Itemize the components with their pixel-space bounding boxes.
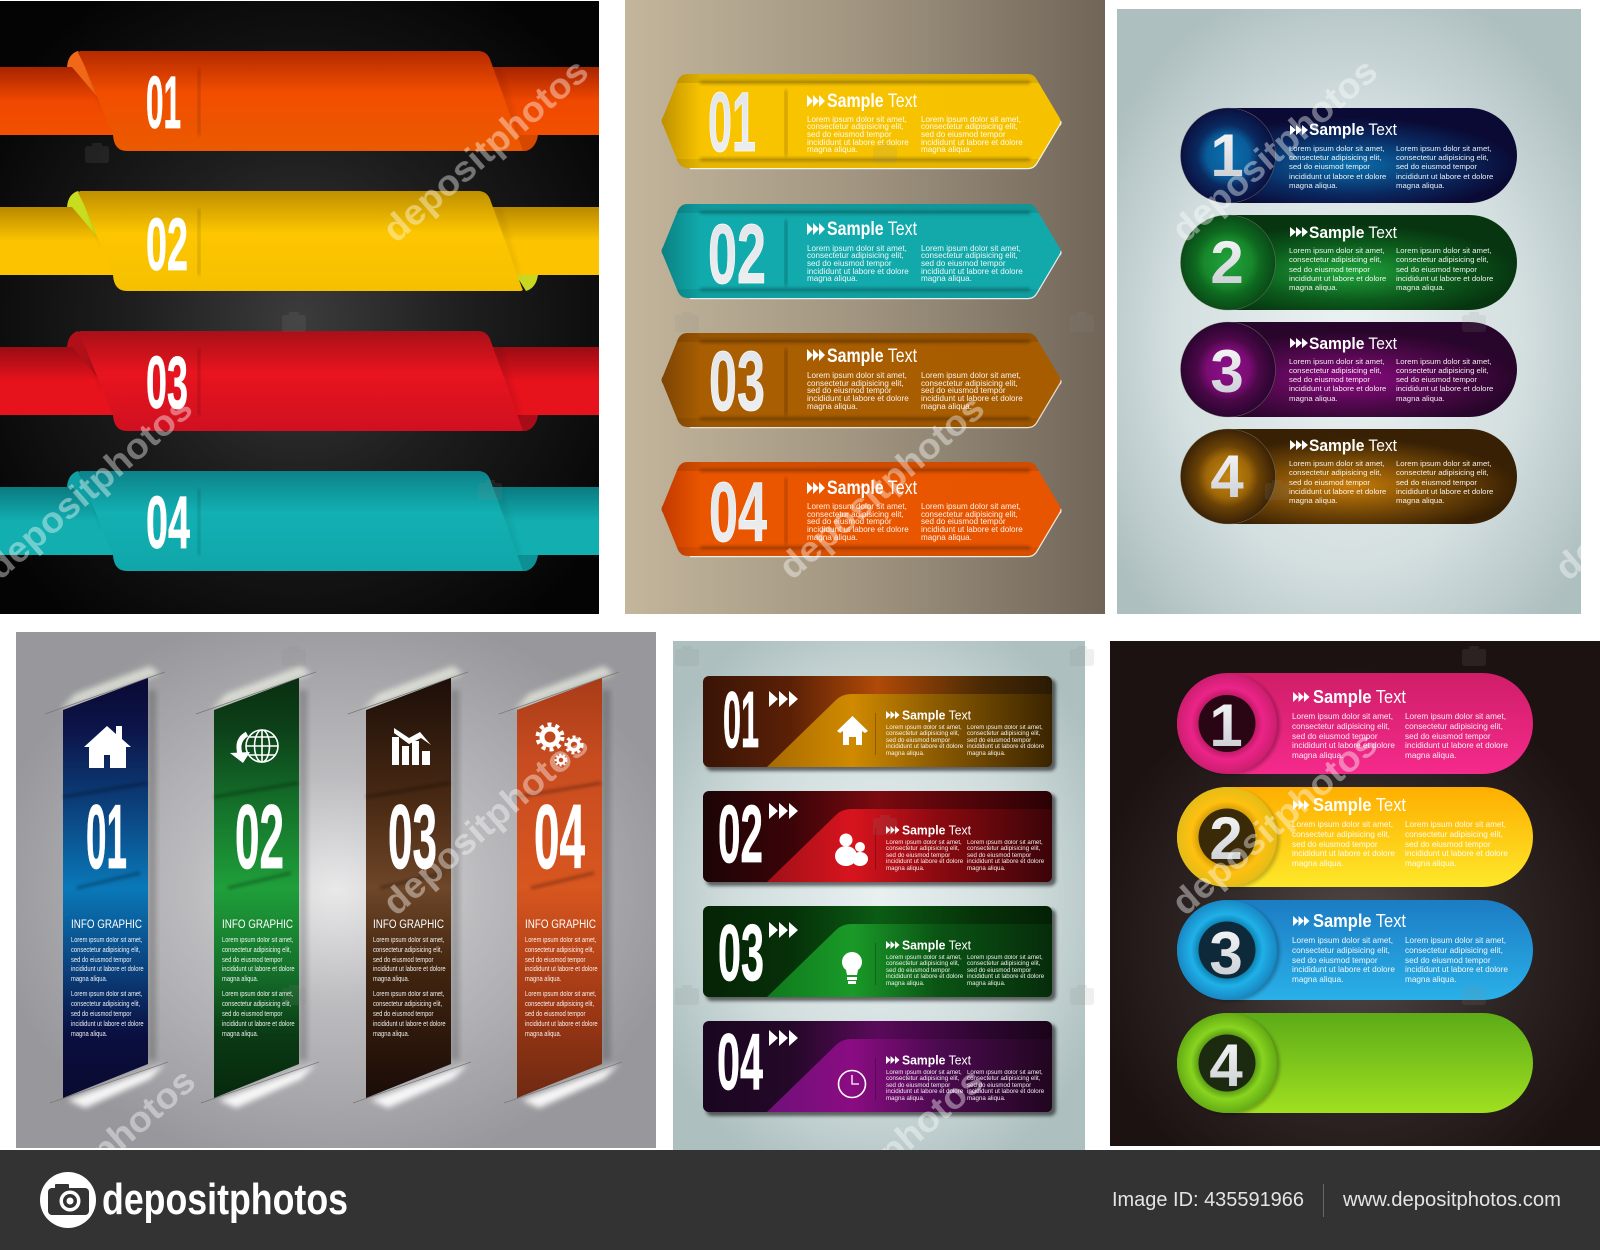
card 04 purple: incididunt ut labore et dolore: [886, 1088, 963, 1095]
card 03 green: incididunt ut labore et dolore: [967, 973, 1044, 980]
camera watermarks: [85, 143, 1486, 1005]
pill 4 amber: consectetur adipisicing elit,: [1289, 468, 1382, 477]
pill 1 pink: Lorem ipsum dolor sit amet,: [1405, 712, 1506, 721]
pill 3 purple: magna aliqua.: [1289, 394, 1338, 403]
pill 3 blue: Sample Text: [1313, 911, 1406, 931]
card 03 green: [703, 906, 1056, 1001]
pill 1 pink: sed do eiusmod tempor: [1292, 732, 1378, 741]
pill 4 amber: [1180, 429, 1517, 524]
bar 04 red-orange: magna aliqua.: [525, 976, 561, 983]
icon: bar chart: [392, 728, 431, 765]
arrow banner 03 brown: incididunt ut labore et dolore: [807, 394, 909, 403]
pill 1 blue: sed do eiusmod tempor: [1289, 162, 1370, 171]
card 01 amber: consectetur adipisicing elit,: [967, 730, 1040, 737]
icon: globe with arrow: [230, 730, 278, 763]
arrow banner 03 brown: magna aliqua.: [921, 402, 972, 411]
bar 02 green: incididunt ut labore et dolore: [222, 1021, 295, 1028]
arrow banner 02 teal: magna aliqua.: [921, 274, 972, 283]
pill 3 blue: magna aliqua.: [1405, 975, 1456, 984]
bar 01 blue: consectetur adipisicing elit,: [71, 947, 140, 954]
card 03 green: consectetur adipisicing elit,: [967, 960, 1040, 967]
card 01 amber: incididunt ut labore et dolore: [886, 743, 963, 750]
pill 2 green: incididunt ut labore et dolore: [1396, 274, 1493, 283]
card 01 amber: sed do eiusmod tempor: [886, 737, 950, 744]
icon: clock: [838, 1070, 866, 1098]
pill 3 blue: magna aliqua.: [1292, 975, 1343, 984]
pill 2 green: sed do eiusmod tempor: [1289, 265, 1370, 274]
bar 01 blue: magna aliqua.: [71, 976, 107, 983]
arrow banner 03 brown: sed do eiusmod tempor: [807, 386, 892, 395]
arrow banner 02 teal: consectetur adipisicing elit,: [807, 251, 904, 260]
arrow banner 02 teal: Sample Text: [827, 219, 918, 240]
pill 2 yellow: magna aliqua.: [1405, 859, 1456, 868]
icon: light bulb: [842, 952, 862, 984]
card 04 purple: consectetur adipisicing elit,: [967, 1075, 1040, 1082]
card 01 amber: consectetur adipisicing elit,: [886, 730, 959, 737]
bar 01 blue: consectetur adipisicing elit,: [71, 1001, 140, 1008]
pill 1 pink: [1177, 673, 1533, 775]
bar 04 red-orange: [499, 666, 622, 1108]
ribbon 03 red: 03: [146, 341, 188, 424]
pill 2 green: Lorem ipsum dolor sit amet,: [1289, 246, 1385, 255]
bar 04 red-orange: incididunt ut labore et dolore: [525, 1021, 598, 1028]
card 03 green: magna aliqua.: [886, 980, 925, 987]
pill 2 yellow: [1177, 787, 1533, 889]
pill 1 blue: magna aliqua.: [1289, 181, 1338, 190]
card 04 purple: incididunt ut labore et dolore: [967, 1088, 1044, 1095]
pill 3 blue: Lorem ipsum dolor sit amet,: [1292, 936, 1393, 945]
pill 3 blue: 3: [1209, 920, 1243, 987]
pill 1 pink: sed do eiusmod tempor: [1405, 732, 1491, 741]
pill 4 amber: incididunt ut labore et dolore: [1289, 487, 1386, 496]
panel: ring pills on dark: [1110, 641, 1600, 1146]
pill 3 purple: sed do eiusmod tempor: [1396, 375, 1477, 384]
bar 04 red-orange: consectetur adipisicing elit,: [525, 1001, 594, 1008]
pill 2 yellow: magna aliqua.: [1292, 859, 1343, 868]
bar 04 red-orange: incididunt ut labore et dolore: [525, 966, 598, 973]
logo wordmark: depositphotos: [102, 1175, 348, 1224]
pill 1 blue: magna aliqua.: [1396, 181, 1445, 190]
pill 2 yellow: sed do eiusmod tempor: [1405, 840, 1491, 849]
card 02 red: incididunt ut labore et dolore: [886, 858, 963, 865]
depositphotos watermarks: depositphotos: [374, 50, 596, 250]
arrow banner 01 yellow: incididunt ut labore et dolore: [921, 138, 1023, 147]
depositphotos watermarks: depositphotos: [374, 723, 596, 923]
card 04 purple: magna aliqua.: [967, 1095, 1006, 1102]
pill 2 green: [1180, 215, 1517, 310]
bar 03 brown: sed do eiusmod tempor: [373, 956, 433, 964]
arrow banner 04 orange: consectetur adipisicing elit,: [921, 510, 1018, 519]
arrow banner 02 teal: consectetur adipisicing elit,: [921, 251, 1018, 260]
arrow banner 04 orange: magna aliqua.: [921, 533, 972, 542]
pill 2 yellow: incididunt ut labore et dolore: [1292, 849, 1395, 858]
bar 01 blue: 01: [86, 787, 127, 888]
bar 02 green: incididunt ut labore et dolore: [222, 966, 295, 973]
bar 03 brown: magna aliqua.: [373, 976, 409, 983]
arrow banner 04 orange: magna aliqua.: [807, 533, 858, 542]
arrow banner 02 teal: incididunt ut labore et dolore: [807, 267, 909, 276]
bar 03 brown: consectetur adipisicing elit,: [373, 1001, 442, 1008]
pill 2 green: consectetur adipisicing elit,: [1396, 255, 1489, 264]
bar 01 blue: magna aliqua.: [71, 1031, 107, 1038]
arrow banner 01 yellow: magna aliqua.: [921, 145, 972, 154]
pill 2 green: magna aliqua.: [1289, 283, 1338, 292]
card 01 amber: 01: [723, 675, 759, 764]
card 03 green: sed do eiusmod tempor: [967, 967, 1031, 974]
pill 3 purple: Lorem ipsum dolor sit amet,: [1289, 356, 1385, 366]
card 01 amber: sed do eiusmod tempor: [967, 737, 1031, 744]
bar 03 brown: magna aliqua.: [373, 1031, 409, 1038]
pill 1 blue: [1180, 108, 1517, 203]
bar 03 brown: incididunt ut labore et dolore: [373, 966, 446, 973]
card 04 purple: magna aliqua.: [886, 1095, 925, 1102]
bar 03 brown: incididunt ut labore et dolore: [373, 1021, 446, 1028]
ribbon 04 teal: 04: [146, 481, 190, 564]
card 04 purple: 04: [717, 1017, 763, 1106]
arrow banner 01 yellow: Sample Text: [827, 91, 918, 112]
footer bar: [0, 1150, 1600, 1250]
pill 2 green: consectetur adipisicing elit,: [1289, 255, 1382, 264]
pill 3 purple: Sample Text: [1309, 334, 1397, 353]
card 02 red: 02: [718, 789, 763, 880]
bar 03 brown: 03: [388, 787, 437, 888]
pill 2 green: incididunt ut labore et dolore: [1289, 274, 1386, 283]
pill 3 purple: magna aliqua.: [1396, 394, 1445, 403]
bar 02 green: magna aliqua.: [222, 976, 258, 983]
card 03 green: incididunt ut labore et dolore: [886, 973, 963, 980]
icon: gears: [538, 724, 582, 766]
bar 03 brown: INFO GRAPHIC: [373, 919, 444, 931]
pill 2 yellow: Sample Text: [1313, 795, 1406, 815]
bar 01 blue: incididunt ut labore et dolore: [71, 1021, 144, 1028]
pill 3 purple: [1180, 322, 1517, 417]
pill 2 yellow: consectetur adipisicing elit,: [1292, 830, 1390, 839]
pill 4 amber: Lorem ipsum dolor sit amet,: [1396, 459, 1492, 468]
pill 3 purple: incididunt ut labore et dolore: [1289, 384, 1386, 393]
pill 2 green: Sample Text: [1309, 223, 1397, 242]
pill 3 purple: consectetur adipisicing elit,: [1396, 366, 1489, 375]
pill 4 amber: sed do eiusmod tempor: [1289, 478, 1370, 487]
pill 4 amber: Sample Text: [1309, 436, 1397, 455]
pill 4 green: 4: [1209, 1032, 1243, 1099]
ribbon 04 teal: [0, 471, 599, 571]
bar 02 green: sed do eiusmod tempor: [222, 1011, 282, 1018]
card 01 amber: [703, 675, 1056, 771]
pill 4 amber: sed do eiusmod tempor: [1396, 478, 1477, 487]
bar 04 red-orange: magna aliqua.: [525, 1031, 561, 1038]
card 01 amber: incididunt ut labore et dolore: [967, 743, 1044, 750]
arrow banner 04 orange: incididunt ut labore et dolore: [921, 525, 1023, 534]
arrow banner 02 teal: sed do eiusmod tempor: [807, 259, 892, 268]
card 03 green: Sample Text: [902, 938, 972, 952]
panel: glossy pills: [1117, 9, 1581, 614]
card 02 red: sed do eiusmod tempor: [967, 852, 1031, 859]
bar 04 red-orange: Lorem ipsum dolor sit amet,: [525, 937, 596, 944]
arrow banner 03 brown: [662, 333, 1060, 428]
pill 2 yellow: incididunt ut labore et dolore: [1405, 849, 1508, 858]
pill 1 blue: incididunt ut labore et dolore: [1396, 172, 1493, 181]
arrow banner 02 teal: [662, 204, 1060, 301]
bar 02 green: sed do eiusmod tempor: [222, 956, 282, 964]
panel: rectangular cards: [673, 641, 1085, 1150]
pill 3 purple: Lorem ipsum dolor sit amet,: [1396, 356, 1492, 366]
card 04 purple: [703, 1017, 1056, 1116]
card 03 green: 03: [718, 908, 764, 997]
pill 2 yellow: 2: [1209, 805, 1243, 872]
bar 02 green: consectetur adipisicing elit,: [222, 1001, 291, 1008]
arrow banner 01 yellow: sed do eiusmod tempor: [921, 130, 1006, 139]
arrow banner 04 orange: sed do eiusmod tempor: [921, 517, 1006, 526]
bar 03 brown: Lorem ipsum dolor sit amet,: [373, 991, 444, 998]
bar 01 blue: [45, 666, 168, 1108]
pill 4 amber: magna aliqua.: [1396, 496, 1445, 505]
bar 02 green: magna aliqua.: [222, 1031, 258, 1038]
pill 4 amber: consectetur adipisicing elit,: [1396, 468, 1489, 477]
arrow banner 02 teal: incididunt ut labore et dolore: [921, 267, 1023, 276]
arrow banner 01 yellow: [662, 74, 1060, 169]
pill 1 blue: sed do eiusmod tempor: [1396, 162, 1477, 171]
bar 03 brown: sed do eiusmod tempor: [373, 1011, 433, 1018]
pill 2 green: 2: [1210, 229, 1244, 296]
bar 04 red-orange: sed do eiusmod tempor: [525, 956, 585, 964]
card 04 purple: sed do eiusmod tempor: [967, 1082, 1031, 1089]
arrow banner 03 brown: magna aliqua.: [807, 402, 858, 411]
card 02 red: incididunt ut labore et dolore: [967, 858, 1044, 865]
ribbon 02 yellow: [0, 191, 599, 291]
card 01 amber: Sample Text: [902, 708, 972, 722]
bar 01 blue: Lorem ipsum dolor sit amet,: [71, 937, 142, 944]
bar 02 green: consectetur adipisicing elit,: [222, 947, 291, 954]
pill 3 purple: sed do eiusmod tempor: [1289, 375, 1370, 384]
ribbon 02 yellow: 02: [146, 203, 188, 286]
pill 3 blue: incididunt ut labore et dolore: [1292, 965, 1395, 974]
arrow banner 02 teal: sed do eiusmod tempor: [921, 259, 1006, 268]
arrow banner 03 brown: consectetur adipisicing elit,: [807, 379, 904, 388]
arrow banner 04 orange: [662, 462, 1060, 559]
arrow banner 03 brown: sed do eiusmod tempor: [921, 386, 1006, 395]
arrow banner 04 orange: consectetur adipisicing elit,: [807, 510, 904, 519]
arrow banner 03 brown: Sample Text: [827, 346, 918, 367]
bar 04 red-orange: INFO GRAPHIC: [525, 919, 596, 931]
pill 1 pink: magna aliqua.: [1292, 751, 1343, 760]
pill 3 blue: [1177, 900, 1533, 1002]
bar 04 red-orange: consectetur adipisicing elit,: [525, 947, 594, 954]
pill 2 green: magna aliqua.: [1396, 283, 1445, 292]
arrow banner 01 yellow: consectetur adipisicing elit,: [807, 122, 904, 131]
pill 1 pink: incididunt ut labore et dolore: [1405, 741, 1508, 750]
pill 1 pink: Sample Text: [1313, 687, 1406, 707]
card 02 red: magna aliqua.: [967, 865, 1006, 872]
arrow banner 01 yellow: consectetur adipisicing elit,: [921, 122, 1018, 131]
pill 1 pink: consectetur adipisicing elit,: [1405, 722, 1503, 731]
arrow banner 02 teal: 02: [708, 207, 766, 301]
pill 2 green: sed do eiusmod tempor: [1396, 265, 1477, 274]
website url: www.depositphotos.com: [1342, 1189, 1561, 1211]
pill 4 amber: Lorem ipsum dolor sit amet,: [1289, 459, 1385, 468]
image id: Image ID: 435591966: [1112, 1189, 1304, 1211]
arrow banner 04 orange: incididunt ut labore et dolore: [807, 525, 909, 534]
pill 2 yellow: consectetur adipisicing elit,: [1405, 830, 1503, 839]
pill 4 amber: 4: [1210, 443, 1244, 510]
card 03 green: consectetur adipisicing elit,: [886, 960, 959, 967]
pill 3 blue: sed do eiusmod tempor: [1292, 956, 1378, 965]
card 03 green: sed do eiusmod tempor: [886, 967, 950, 974]
card 01 amber: magna aliqua.: [967, 750, 1006, 757]
pill 1 blue: Lorem ipsum dolor sit amet,: [1289, 144, 1385, 153]
bar 02 green: [196, 666, 319, 1108]
card 03 green: magna aliqua.: [967, 980, 1006, 987]
depositphotos watermarks: depositphotos: [770, 387, 992, 587]
pill 2 yellow: Lorem ipsum dolor sit amet,: [1292, 820, 1393, 829]
ribbon 01 orange: [0, 51, 599, 151]
icon: depositphotos camera logo: [40, 1172, 96, 1228]
pill 1 pink: magna aliqua.: [1405, 751, 1456, 760]
panel: arrow banners: [625, 0, 1105, 614]
bar 03 brown: [348, 666, 471, 1108]
icon: people: [835, 834, 868, 866]
pill 4 green: [1177, 1013, 1533, 1115]
pill 1 blue: 1: [1210, 122, 1244, 189]
bar 02 green: Lorem ipsum dolor sit amet,: [222, 937, 293, 944]
arrow banner 04 orange: sed do eiusmod tempor: [807, 517, 892, 526]
icon: house: [837, 716, 868, 745]
card 02 red: magna aliqua.: [886, 865, 925, 872]
bar 02 green: INFO GRAPHIC: [222, 919, 293, 931]
pill 3 purple: incididunt ut labore et dolore: [1396, 384, 1493, 393]
card 02 red: sed do eiusmod tempor: [886, 852, 950, 859]
pill 3 purple: consectetur adipisicing elit,: [1289, 366, 1382, 375]
arrow banner 03 brown: incididunt ut labore et dolore: [921, 394, 1023, 403]
bar 04 red-orange: Lorem ipsum dolor sit amet,: [525, 991, 596, 998]
ribbon 03 red: [0, 331, 599, 431]
pill 4 amber: magna aliqua.: [1289, 496, 1338, 505]
arrow banner 03 brown: consectetur adipisicing elit,: [921, 379, 1018, 388]
card 02 red: [703, 789, 1056, 886]
pill 3 blue: sed do eiusmod tempor: [1405, 956, 1491, 965]
pill 2 green: Lorem ipsum dolor sit amet,: [1396, 246, 1492, 255]
arrow banner 01 yellow: incididunt ut labore et dolore: [807, 138, 909, 147]
card 02 red: consectetur adipisicing elit,: [886, 845, 959, 852]
arrow banner 01 yellow: 01: [708, 75, 756, 169]
pill 1 pink: consectetur adipisicing elit,: [1292, 722, 1390, 731]
panel: vertical slit bars: [16, 632, 656, 1148]
icon: house: [84, 726, 131, 768]
pill 1 blue: Sample Text: [1309, 120, 1397, 139]
depositphotos watermarks: depositphotos: [1163, 723, 1385, 923]
pill 3 blue: incididunt ut labore et dolore: [1405, 965, 1508, 974]
arrow banner 01 yellow: magna aliqua.: [807, 145, 858, 154]
pill 3 blue: Lorem ipsum dolor sit amet,: [1405, 936, 1506, 945]
pill 1 pink: Lorem ipsum dolor sit amet,: [1292, 712, 1393, 721]
bar 04 red-orange: sed do eiusmod tempor: [525, 1011, 585, 1018]
card 04 purple: consectetur adipisicing elit,: [886, 1075, 959, 1082]
pill 2 yellow: sed do eiusmod tempor: [1292, 840, 1378, 849]
bar 03 brown: consectetur adipisicing elit,: [373, 947, 442, 954]
bar 01 blue: sed do eiusmod tempor: [71, 956, 131, 964]
pill 4 amber: incididunt ut labore et dolore: [1396, 487, 1493, 496]
card 02 red: Sample Text: [902, 824, 972, 838]
bar 01 blue: INFO GRAPHIC: [71, 919, 142, 931]
pill 3 blue: consectetur adipisicing elit,: [1405, 946, 1503, 955]
pill 1 pink: 1: [1209, 692, 1243, 759]
depositphotos watermarks: depositphotos: [1163, 50, 1385, 250]
pill 1 blue: consectetur adipisicing elit,: [1396, 153, 1489, 162]
arrow banner 04 orange: 04: [709, 465, 767, 559]
card 02 red: consectetur adipisicing elit,: [967, 845, 1040, 852]
arrow banner 04 orange: Sample Text: [827, 478, 918, 499]
card 01 amber: magna aliqua.: [886, 750, 925, 757]
arrow banner 01 yellow: sed do eiusmod tempor: [807, 130, 892, 139]
arrow banner 03 brown: 03: [709, 334, 765, 428]
arrow banner 02 teal: magna aliqua.: [807, 274, 858, 283]
bar 04 red-orange: 04: [534, 787, 585, 888]
card 04 purple: sed do eiusmod tempor: [886, 1082, 950, 1089]
bar 01 blue: sed do eiusmod tempor: [71, 1011, 131, 1018]
pill 1 pink: incididunt ut labore et dolore: [1292, 741, 1395, 750]
bar 01 blue: incididunt ut labore et dolore: [71, 966, 144, 973]
bar 01 blue: Lorem ipsum dolor sit amet,: [71, 991, 142, 998]
pill 3 purple: 3: [1210, 338, 1244, 405]
pill 1 blue: Lorem ipsum dolor sit amet,: [1396, 144, 1492, 153]
bar 02 green: 02: [235, 787, 284, 888]
pill 1 blue: consectetur adipisicing elit,: [1289, 153, 1382, 162]
pill 3 blue: consectetur adipisicing elit,: [1292, 946, 1390, 955]
pill 2 yellow: Lorem ipsum dolor sit amet,: [1405, 820, 1506, 829]
card 04 purple: Sample Text: [902, 1054, 972, 1068]
panel: twisted ribbon banners: [0, 1, 599, 614]
bar 02 green: Lorem ipsum dolor sit amet,: [222, 991, 293, 998]
bar 03 brown: Lorem ipsum dolor sit amet,: [373, 937, 444, 944]
pill 1 blue: incididunt ut labore et dolore: [1289, 172, 1386, 181]
ribbon 01 orange: 01: [146, 61, 181, 144]
